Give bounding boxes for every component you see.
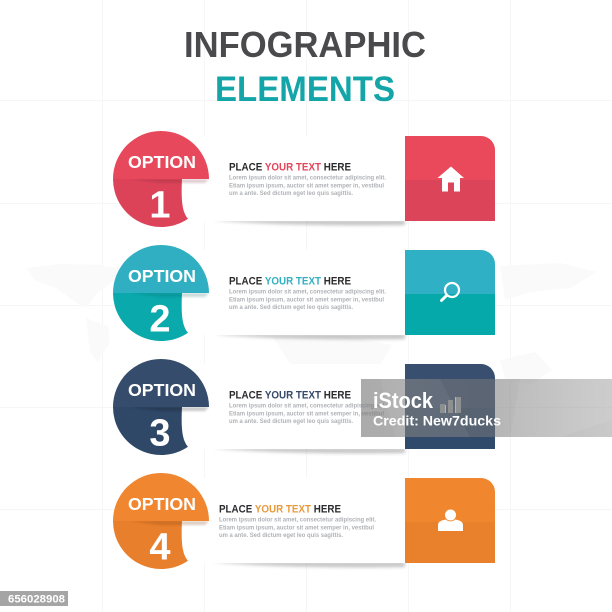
badge: option 3: 3 (149, 412, 171, 454)
title line: INFOGRAPHIC: INFOGRAPHIC (184, 24, 426, 65)
panel: option 3 (113, 359, 495, 455)
white card (182, 364, 405, 449)
text block (229, 276, 386, 311)
text block: Lorem ipsum dolor sit amet, consectetur adipiscing elit. (229, 174, 386, 182)
watermark: iStock credit (361, 379, 612, 437)
badge: option 1: OPTION (128, 152, 196, 172)
icon panel (405, 136, 495, 221)
text block: um a ante. Sed dictum eget leo quis sagittis. (229, 418, 353, 425)
text block: PLACE YOUR TEXT HERE (219, 504, 341, 516)
card shadow (212, 220, 405, 225)
icon panel (405, 364, 495, 449)
icon: bar chart (441, 397, 460, 413)
text block: Lorem ipsum dolor sit amet, consectetur adipiscing elit. (229, 288, 386, 296)
icon panel (405, 250, 495, 335)
text block: um a ante. Sed dictum eget leo quis sagittis. (229, 190, 353, 197)
panel: option 1 (113, 131, 495, 227)
badge: option 3: OPTION (128, 380, 196, 400)
title line: ELEMENTS: ELEMENTS (215, 70, 395, 109)
text block: PLACE YOUR TEXT HERE (229, 162, 351, 174)
icon: person (438, 510, 463, 531)
card shadow (212, 448, 405, 453)
text block: um a ante. Sed dictum eget leo quis sagittis. (229, 304, 353, 311)
badge: option 4 (113, 473, 209, 569)
icon: magnifier (442, 283, 459, 300)
text block: Etiam ipsum ipsum, auctor sit amet semper in, vestibul (219, 524, 374, 532)
text block: Lorem ipsum dolor sit amet, consectetur adipiscing elit. (219, 516, 376, 524)
image id tag: 656028908 (8, 594, 65, 606)
watermark: iStock credit: iStock (373, 388, 434, 413)
text block: Etiam ipsum ipsum, auctor sit amet semper in, vestibul (229, 182, 384, 190)
badge: option 4: OPTION (128, 494, 196, 514)
panel: option 4 (113, 473, 495, 569)
badge: option 4: 4 (149, 526, 171, 568)
badge: option 2 (113, 245, 209, 341)
icon: house (438, 166, 464, 192)
icon panel (405, 478, 495, 563)
badge: option 2: OPTION (128, 266, 196, 286)
white card (182, 136, 405, 221)
text block (229, 390, 386, 425)
text block (229, 162, 386, 197)
badge: option 1: 1 (149, 184, 171, 226)
title (184, 24, 426, 109)
text block: PLACE YOUR TEXT HERE (229, 390, 351, 402)
badge: option 1 (113, 131, 209, 227)
card shadow (212, 562, 405, 567)
panel: option 2 (113, 245, 495, 341)
text block (219, 504, 376, 539)
text block: um a ante. Sed dictum eget leo quis sagittis. (219, 532, 343, 539)
badge: option 3 (113, 359, 209, 455)
background world map (27, 263, 597, 385)
text block: PLACE YOUR TEXT HERE (229, 276, 351, 288)
image id tag (0, 591, 68, 606)
watermark: iStock credit: Credit: New7ducks (373, 414, 501, 428)
text block: Etiam ipsum ipsum, auctor sit amet semper in, vestibul (229, 296, 384, 304)
white card (182, 478, 405, 563)
badge: option 2: 2 (149, 298, 171, 340)
text block: Etiam ipsum ipsum, auctor sit amet semper in, vestibul (229, 410, 384, 418)
card shadow (212, 334, 405, 339)
white card (182, 250, 405, 335)
text block: Lorem ipsum dolor sit amet, consectetur adipiscing elit. (229, 402, 386, 410)
